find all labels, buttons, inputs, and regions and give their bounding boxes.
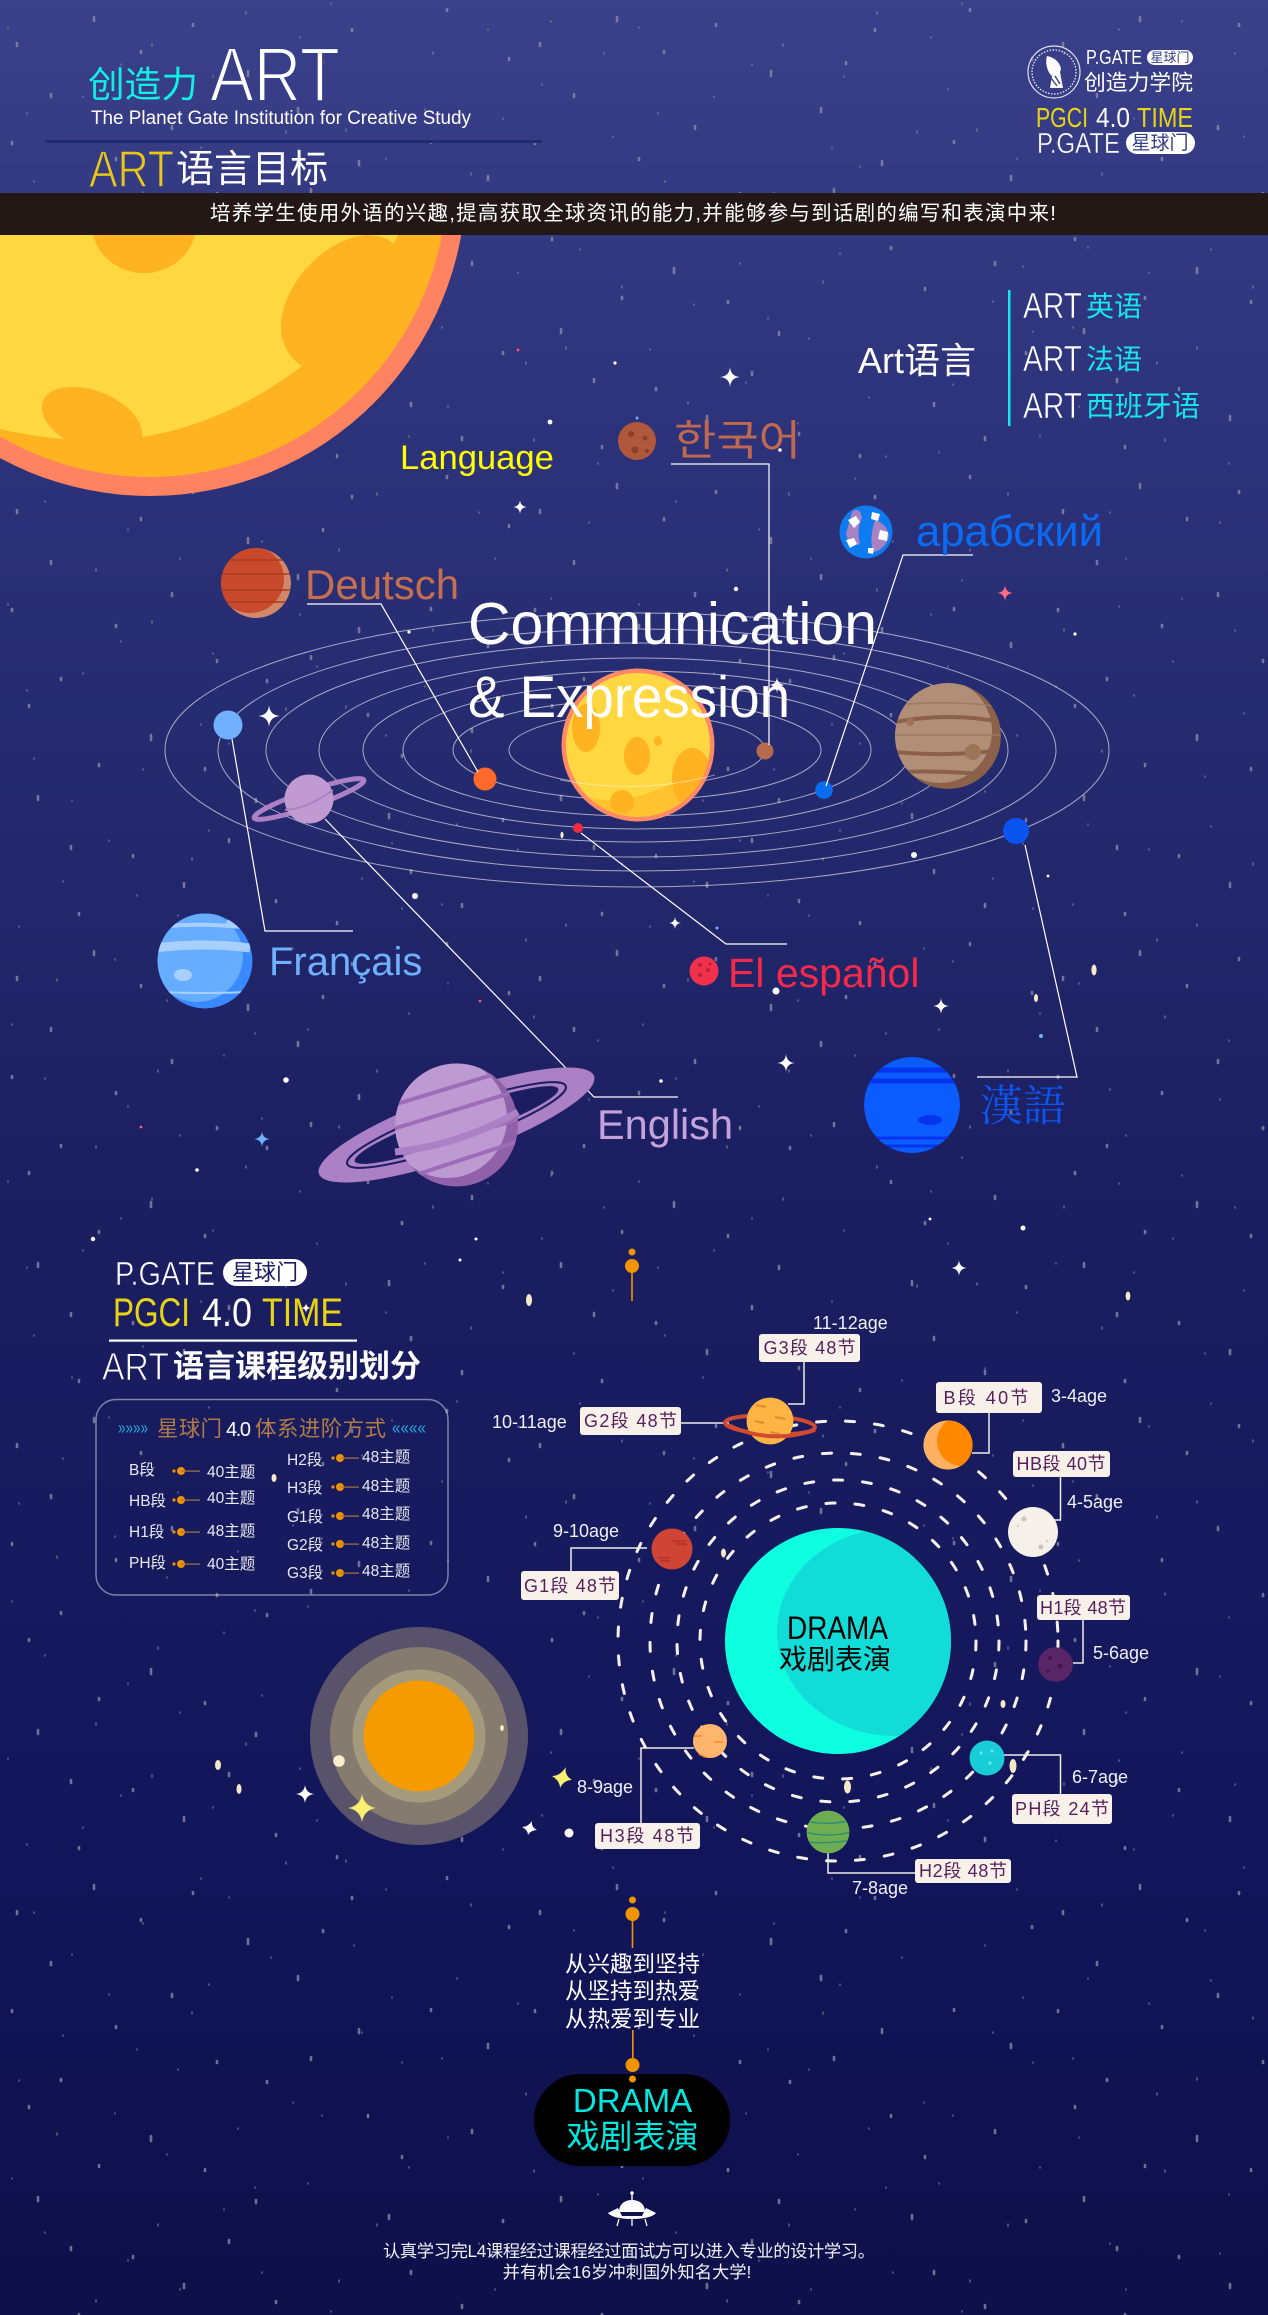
planet: H2 [805,1810,852,1854]
planet label: English, large ringed planet: English [597,1101,733,1148]
level list right: H3段 [287,1479,322,1497]
top right brand block: 星球门 [1131,132,1189,154]
level list right: 48主题 [362,1505,410,1523]
logo title: 创造力 ART [88,32,340,118]
headline: Communication & Expression: & Expression [468,665,790,730]
tagline: The Planet Gate Institution for Creative Study [91,108,471,129]
sparkles [296,1767,574,1838]
age labels: 4-5age [1067,1492,1123,1512]
tag: G3: G3段 48节 [764,1338,856,1358]
age labels: 6-7age [1072,1767,1128,1787]
panel: Art language list: Art语言 [858,340,976,381]
tag: PH: PH段 24节 [1015,1799,1109,1819]
top right brand block: P.GATE [1086,47,1142,69]
icon: concentric glowing sun [310,1627,528,1845]
age labels: 5-6age [1093,1643,1149,1663]
top right brand block: 4.0 [1096,102,1130,133]
age labels: 3-4age [1051,1386,1107,1406]
tag: G2 [580,1407,681,1435]
age labels: 10-11age [492,1412,567,1432]
planet: G1 [652,1528,692,1570]
planet: B [924,1420,973,1470]
central planet: drama: 戏剧表演 [779,1644,891,1675]
solar system orbit diagram [165,464,1109,1097]
panel: Art language list: ART [1023,285,1082,326]
planet: H1 [1038,1647,1073,1682]
central planet: drama [725,1528,951,1754]
lower connector with text [565,1896,700,2060]
level list left: PH段 [129,1554,166,1572]
planet label: Arabic: арабский [916,508,1103,556]
icon: small ringed planet [252,773,366,825]
panel: Art language list: 西班牙语 [1086,391,1200,423]
planet label: Korean: 한국어 [674,407,801,468]
heading: course level division: 星球门 [232,1260,298,1285]
tag: H3: H3段 48节 [600,1826,694,1846]
level list right: G3段 [287,1564,323,1582]
planet: G3 ringed [725,1398,815,1444]
tag: G3 [759,1334,860,1362]
tag: G1: G1段 48节 [524,1576,616,1596]
headline: Communication & Expression [468,591,877,730]
tag: H2: H2段 48节 [919,1861,1007,1881]
label: Language: Language [400,439,554,477]
drama pill [534,2058,730,2166]
icon: UFO [608,2191,656,2226]
panel title: »»»» [118,1418,148,1438]
tag: G1 [521,1571,619,1600]
level list right: H2段 [287,1451,322,1469]
progression text: 从热爱到专业 [565,2007,700,2032]
progression text: 从兴趣到坚持 [565,1952,700,1977]
panel: Art language list [858,285,1200,426]
heading: course level division: PGCI [113,1291,190,1335]
level list left: HB段 [129,1492,166,1510]
heading: ART语言目标 [89,141,328,199]
top right brand block: PGCI [1036,102,1088,133]
drama orbit diagram [492,1313,1149,1898]
planet label: Arabic [840,506,1103,558]
panel title: 星球门 [157,1417,222,1441]
heading: course level division: 4.0 [202,1291,252,1335]
heading: course level division [102,1255,421,1389]
panel: Art language list: ART [1023,338,1082,379]
level tags [521,1334,1130,1883]
planet label: Korean [618,407,801,468]
heading: course level division: 语言课程级别划分 [173,1349,421,1384]
callout lines [232,464,1077,1097]
planet label: Deutsch: Deutsch [305,561,459,608]
planet label: Deutsch [216,545,459,618]
small orbit planets [214,710,1029,844]
drama pill: DRAMA [573,2082,692,2119]
top right brand block: 星球门 [1150,50,1190,65]
level list left: 48主题 [207,1522,255,1540]
heading: course level division: ART [102,1346,169,1389]
headline: Communication & Expression: Communication [468,591,877,657]
heading: ART语言目标: 语言目标 [176,149,328,191]
connector lines [571,1362,1083,1873]
objective banner: 培养学生使用外语的兴趣,提高获取全球资讯的能力,并能够参与到话剧的编写和表演中来! [210,202,1056,225]
logo title: 创造力 ART: ART [210,32,340,118]
tag: B [936,1382,1042,1413]
drama pill: 戏剧表演 [566,2118,698,2155]
top right brand block: P.GATE [1037,128,1120,160]
level list right [287,1448,410,1582]
panel title [118,1417,426,1441]
level list right: 48主题 [362,1534,410,1552]
heading: ART语言目标: ART [89,141,174,199]
age labels [492,1313,1149,1898]
tag: PH [1012,1794,1112,1824]
top right brand block: TIME [1137,102,1193,133]
planet label: Français: Français [269,940,422,984]
icon: large yellow sun corner [0,235,462,496]
dashed orbits [618,1421,1058,1861]
tag: G2: G2段 48节 [584,1411,677,1431]
planet label: El español: El español [728,950,919,996]
footer note: 认真学习完L4课程经过课程经过面试方可以进入专业的设计学习。 [383,2241,875,2261]
planet label: English, large ringed planet [318,1064,730,1186]
level list right: G1段 [287,1508,323,1526]
logo title: 创造力 ART: 创造力 [88,64,198,105]
footer note [383,2241,875,2282]
panel: Art language list: 英语 [1086,291,1142,322]
objective banner [0,193,1268,235]
orbits [165,613,1109,887]
top right brand block [1028,46,1195,160]
level list left [129,1461,255,1573]
level list left: B段 [129,1461,155,1479]
heading: course level division: P.GATE [115,1255,215,1292]
heading: course level division: TIME [262,1291,343,1335]
connector top ornament [625,1248,639,1301]
age labels: 7-8age [852,1878,908,1898]
tag: HB: HB段 40节 [1016,1454,1106,1474]
icon: brown planet [888,679,1001,789]
planet: H3 [693,1724,727,1758]
panel: Art language list: ART [1023,385,1082,426]
planet: HB [1008,1507,1058,1557]
tag: H1: H1段 48节 [1040,1598,1126,1618]
progression text: 从坚持到热爱 [565,1979,700,2004]
planet label: Français [151,910,422,1008]
tag: B: B段 40节 [944,1388,1028,1408]
level list right: 48主题 [362,1562,410,1580]
level list left: 40主题 [207,1555,255,1573]
planet: PH [970,1740,1004,1776]
level list left: 40主题 [207,1489,255,1507]
panel title: 体系进阶方式 [255,1417,386,1441]
level list left: 40主题 [207,1463,255,1481]
top right brand block: 创造力学院 [1084,70,1193,95]
tag: H3 [595,1823,700,1849]
age labels: 11-12age [813,1313,888,1333]
planet label: Chinese: 漢語 [980,1073,1066,1134]
panel: progression levels [96,1400,448,1595]
level list right: 48主题 [362,1477,410,1495]
age labels: 8-9age [577,1777,633,1797]
icon: central sun [560,668,715,822]
icon: academy seal [1028,46,1080,98]
panel title: 4.0 [226,1419,251,1441]
age labels: 9-10age [553,1521,619,1541]
panel: Art language list: 法语 [1086,344,1142,375]
footer note: 并有机会16岁冲刺国外知名大学! [503,2262,751,2282]
progression text [565,1952,700,2032]
level list right: G2段 [287,1536,323,1554]
central planet: drama: DRAMA [787,1610,889,1646]
level list left: H1段 [129,1523,164,1541]
panel title: «««« [392,1418,426,1438]
planet label: Chinese [864,1057,1066,1153]
level list right: 48主题 [362,1448,410,1466]
